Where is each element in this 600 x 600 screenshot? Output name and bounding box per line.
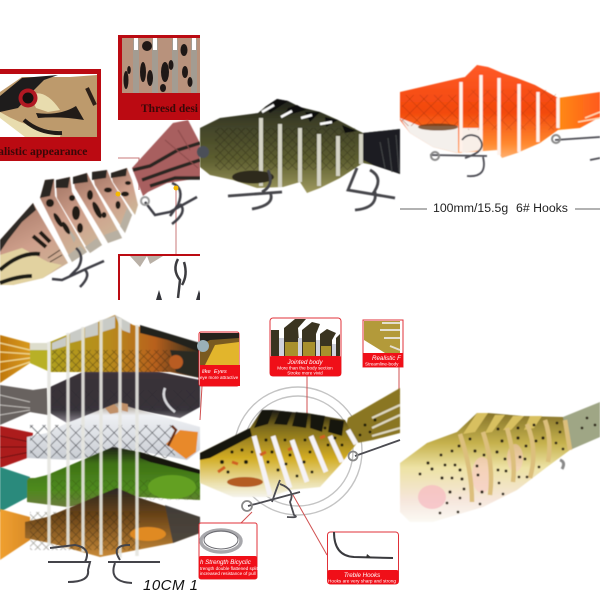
callout: high strength bicyclic ring: trength double flattened split	[200, 566, 258, 571]
callout dots	[116, 186, 178, 196]
lure: trout swimbait	[200, 388, 400, 497]
panel: five colour variants	[0, 315, 200, 594]
target circles	[234, 387, 362, 515]
lure: rainbow trout swimbait	[400, 402, 600, 522]
spec label: size and hooks: 6# Hooks	[516, 201, 568, 215]
lure variant: purple	[0, 358, 200, 425]
callout: jointed body: Stroke more vivid	[287, 370, 323, 376]
callout: fish-like eyes: like Eyes	[202, 369, 227, 375]
callout: jointed body: More than the body section	[277, 366, 333, 370]
callout: realistic fin	[363, 320, 403, 367]
callout: high strength bicyclic ring	[199, 523, 258, 579]
callout connector lines	[118, 158, 176, 254]
hooks	[430, 135, 487, 176]
callout: fish-like eyes	[197, 332, 240, 386]
lure variant: gold	[0, 315, 200, 383]
spec label: size and hooks: 100mm/15.5g	[433, 201, 508, 215]
callout: hook detail	[118, 254, 200, 300]
treble hooks	[48, 545, 160, 583]
callout: jointed body: Jointed body	[286, 359, 323, 366]
lure: brown spotted swimbait	[0, 120, 200, 287]
head belly	[400, 118, 458, 153]
callout: treble hooks: Treble Hooks	[344, 572, 380, 579]
lure: dark green swimbait	[197, 99, 400, 210]
panel: trout lure with red callouts	[197, 318, 403, 584]
hooks	[242, 440, 400, 517]
lure: orange swimbait	[400, 65, 600, 176]
lure variant: green	[0, 447, 200, 512]
hooks	[228, 170, 282, 209]
tail	[558, 92, 600, 130]
panel: brown lure with callouts	[0, 35, 209, 305]
segments	[40, 179, 87, 262]
spec label: size and hooks	[400, 201, 600, 215]
callout: thread design	[118, 35, 200, 120]
callout: realistic fin: Realistic F	[372, 355, 402, 362]
head	[0, 203, 68, 285]
callout: treble hooks: Hooks are very sharp and strong	[328, 578, 396, 584]
callout: realistic fin: Streamline-body	[365, 362, 399, 366]
callout: realistic appearance	[0, 69, 101, 161]
silver segment bands	[49, 318, 137, 558]
callout: treble hooks	[328, 532, 398, 584]
callout: fish-like eyes: eye more attractive	[200, 375, 239, 380]
size label: 10CM 1	[143, 577, 199, 594]
tail	[132, 120, 200, 196]
callout: thread design: Thresd desi	[141, 103, 199, 115]
lure variant: orange brown	[0, 488, 200, 560]
connector lines	[200, 367, 399, 555]
hooks	[52, 248, 104, 287]
lure variant: white scaled	[0, 402, 200, 468]
callout: jointed body	[270, 318, 341, 376]
tail dark	[363, 129, 400, 174]
callout: high strength bicyclic ring: increased resistance of pull	[200, 571, 256, 576]
callout: high strength bicyclic ring: h Strength Bicyclic	[200, 559, 252, 566]
